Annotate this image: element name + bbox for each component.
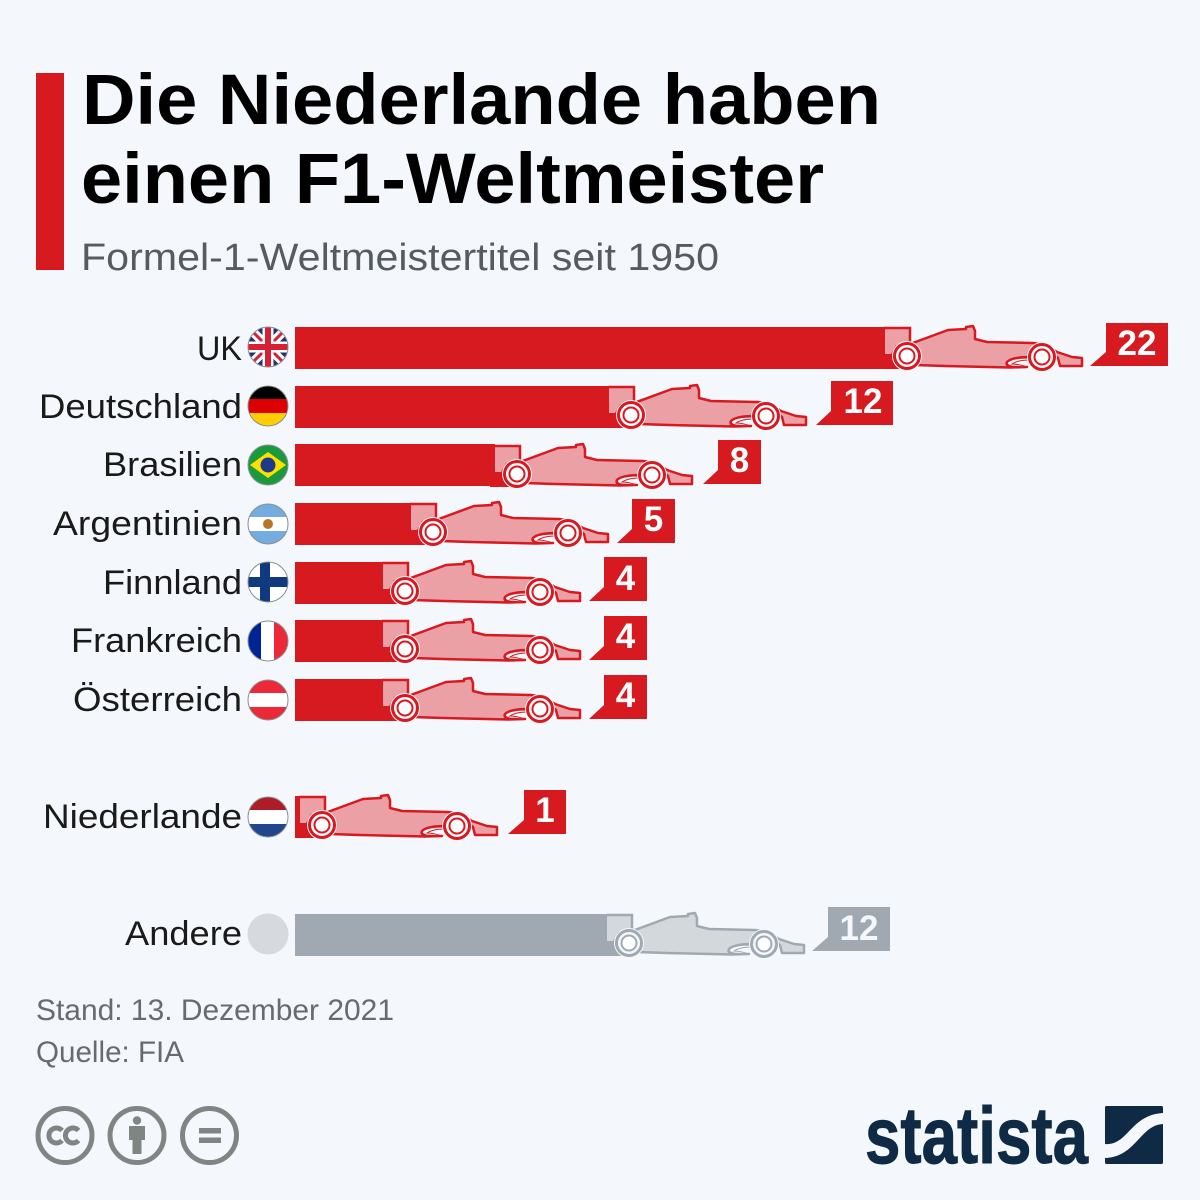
flag: Netherlands (248, 797, 288, 837)
flag: Austria (248, 680, 288, 720)
value: 1 (535, 791, 555, 830)
row: Frankreich (71, 616, 647, 665)
value: 5 (644, 500, 663, 539)
icon: no derivatives (182, 1108, 236, 1162)
value (617, 499, 675, 543)
bar (295, 503, 411, 545)
value: 4 (616, 559, 636, 598)
value: 12 (840, 909, 878, 948)
title (81, 61, 881, 219)
title: Die Niederlande haben (82, 61, 881, 140)
flag: Argentina (248, 504, 288, 544)
flag: France (248, 621, 288, 661)
row: Brasilien: Brasilien (103, 446, 242, 484)
source notes: Stand: 13. Dezember 2021 (36, 994, 394, 1027)
bar (295, 327, 885, 369)
row: Niederlande (43, 790, 566, 841)
source notes (36, 994, 394, 1069)
row: Österreich (73, 675, 647, 724)
row: Argentinien (53, 499, 675, 548)
row: UK: UK (197, 330, 242, 368)
row: Andere: Andere (125, 915, 242, 953)
flag: UK (248, 327, 288, 367)
value: 4 (616, 676, 636, 715)
row: Finnland (103, 557, 647, 607)
row: Niederlande: Niederlande (43, 798, 242, 836)
row: Argentinien: Argentinien (53, 505, 242, 543)
bar (295, 620, 383, 662)
value (816, 381, 893, 425)
source notes: Quelle: FIA (36, 1036, 184, 1069)
car (490, 444, 692, 490)
statista wordmark: statista (865, 1091, 1088, 1180)
value: 22 (1118, 324, 1156, 363)
row: Österreich: Österreich (73, 681, 242, 719)
bar (295, 679, 383, 721)
value: 8 (730, 441, 749, 480)
flag: Brazil (248, 445, 288, 485)
subtitle: Formel-1-Weltmeistertitel seit 1950 (81, 237, 719, 279)
statista logo mark (1105, 1106, 1163, 1164)
icon: creative commons (38, 1108, 92, 1162)
row: Deutschland (39, 381, 893, 431)
row: Andere (125, 907, 890, 959)
flag: Finland (248, 562, 288, 602)
bar (295, 444, 495, 486)
row: UK (197, 323, 1168, 372)
car (378, 619, 580, 665)
car (295, 795, 497, 841)
row: Finnland: Finnland (103, 564, 242, 602)
row: Deutschland: Deutschland (39, 388, 242, 426)
flag placeholder (248, 914, 288, 954)
value (508, 790, 566, 834)
car (406, 502, 608, 548)
value (812, 907, 890, 951)
row: Frankreich: Frankreich (71, 622, 242, 660)
value (589, 675, 647, 719)
value (1090, 323, 1168, 366)
title: einen F1-Weltmeister (81, 140, 824, 219)
value: 12 (844, 382, 882, 421)
title accent bar (36, 73, 64, 270)
flag: Germany (248, 386, 288, 426)
car (378, 561, 580, 607)
value (703, 440, 761, 484)
car (602, 913, 804, 959)
bar (295, 386, 609, 428)
value (589, 616, 647, 660)
bar (295, 562, 383, 604)
car (378, 678, 580, 724)
car (880, 326, 1082, 372)
value (589, 557, 647, 601)
car (604, 385, 806, 431)
row: Brasilien (103, 440, 761, 490)
value: 4 (616, 617, 636, 656)
icon: attribution (110, 1108, 164, 1162)
bar (295, 914, 607, 956)
